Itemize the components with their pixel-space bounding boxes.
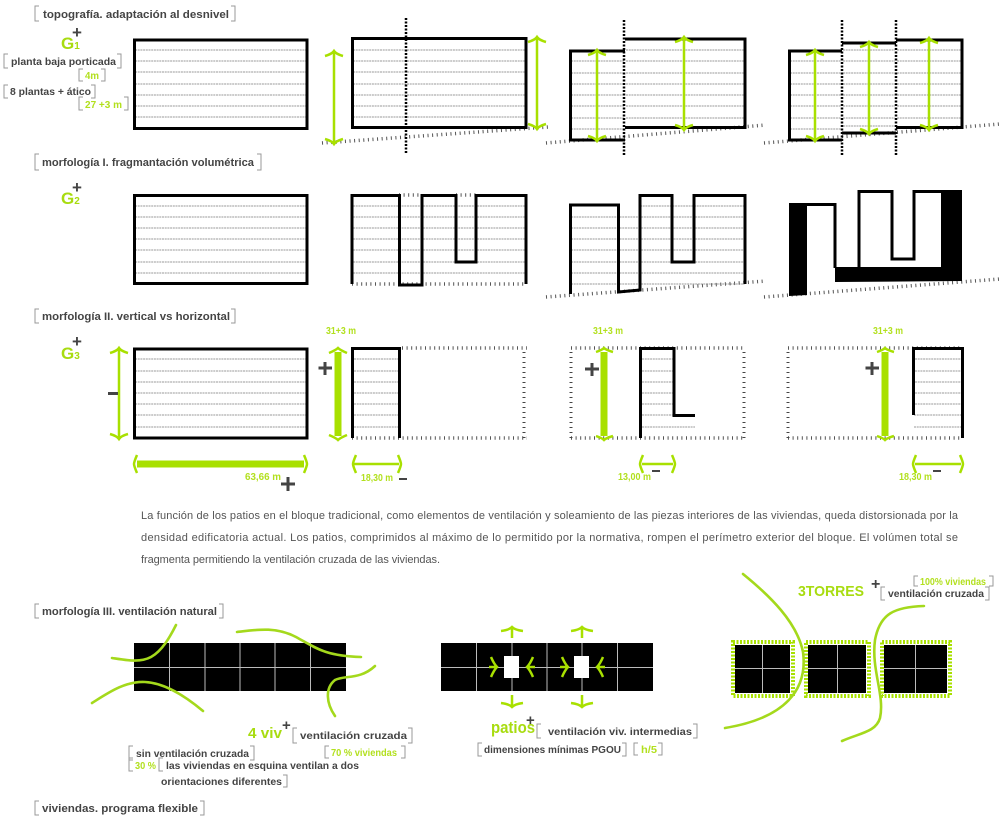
notes: 4 viv: ventilación cruzada — [300, 731, 407, 742]
heading: viviendas: viviendas. programa flexible — [42, 803, 198, 815]
diagram: G1 stepped block in two parts — [546, 20, 766, 155]
notes: 3 torres: 3TORRES — [798, 583, 864, 600]
notes: 4 viv — [129, 717, 412, 788]
diagram: G3 corner bar 18,30 m: 31+3 m — [873, 326, 903, 337]
label: G3: G3 — [61, 344, 80, 363]
notes: 4 viv: 30 % — [135, 761, 156, 772]
diagram: G3 base block with dimensions: 63,66 m — [245, 472, 281, 483]
notes: 4 viv: 4 viv — [248, 725, 283, 742]
notes: patios: patios — [491, 718, 535, 737]
label: G1 with notes: 8 plantas + ático — [10, 87, 91, 98]
notes: 4 viv: 70 % viviendas — [331, 748, 397, 759]
plan: 4 viv block with wind curves — [92, 625, 375, 716]
diagram: G3 base block with dimensions — [108, 348, 307, 491]
notes: patios — [478, 712, 697, 756]
notes: 3 torres: ventilación cruzada — [888, 589, 984, 600]
diagram: G2 fragmented block — [352, 195, 526, 285]
notes: patios: + — [526, 712, 535, 729]
label: G3 — [61, 332, 82, 363]
diagram: G2 base block — [134, 196, 307, 284]
label: G1 with notes: planta baja porticada — [11, 57, 116, 68]
diagram: G1 stepped block in three parts — [764, 20, 1000, 155]
diagram: G1 base block — [134, 40, 307, 128]
diagram: G3 corner bar 18,30 m — [788, 326, 963, 483]
label: G1 with notes: + — [72, 23, 82, 42]
label: G1 with notes — [4, 23, 128, 111]
diagram: G3 L-shaped bar 13,00 m: 13,00 m — [618, 472, 651, 483]
diagram: G3 L-shaped bar 13,00 m — [571, 326, 744, 483]
diagram: G2 fragmented block on slope — [546, 196, 766, 297]
notes: 4 viv: las viviendas en esquina ventilan a dos — [166, 761, 359, 772]
text block: description: fragmenta permitiendo la ventilación cruzada de las viviendas. — [141, 554, 440, 566]
notes: patios: dimensiones mínimas PGOU — [484, 745, 621, 756]
heading: morfología III: morfología III. ventilación natural — [42, 606, 217, 618]
heading: topografía: topografía. adaptación al desnivel — [43, 9, 229, 21]
heading: morfología II: morfología II. vertical vs horizontal — [42, 311, 230, 323]
diagram: G3 narrow bar 18,30 m: 18,30 m — [361, 473, 393, 484]
text block: description: densidad edificatoria actual. Los patios, comprimidos al máximo de lo permitido por la normativa, rompen el perímetro exterior del bloque. El volúmen total se — [141, 532, 958, 544]
notes: 4 viv: orientaciones diferentes — [161, 777, 282, 788]
diagram: G3 narrow bar 18,30 m — [318, 326, 527, 484]
label: G1 with notes: 27 +3 m — [85, 100, 122, 111]
text block: description: La función de los patios en el bloque tradicional, como elementos de ventilación y soleamiento de las piezas interiores de las viviendas, queda distorsionada por la — [141, 510, 959, 522]
label: G3: + — [72, 332, 82, 351]
notes: patios: ventilación viv. intermedias — [548, 727, 692, 738]
notes: 4 viv: + — [282, 717, 291, 734]
notes: 3 torres: + — [871, 576, 880, 593]
label: G2: G2 — [61, 189, 80, 208]
notes: 3 torres: 100% viviendas — [920, 577, 986, 588]
notes: 4 viv: sin ventilación cruzada — [136, 749, 249, 760]
diagram: G3 corner bar 18,30 m: 18,30 m — [899, 472, 932, 483]
diagram: G3 narrow bar 18,30 m: 31+3 m — [326, 326, 356, 337]
label: G1 with notes: 4m — [85, 71, 99, 82]
label: G2 — [61, 178, 82, 208]
notes: 3 torres — [798, 576, 993, 600]
notes: patios: h/5 — [641, 745, 657, 756]
diagram: G2 block with solid black mass — [764, 190, 1000, 297]
plan: three towers with wind curves — [725, 574, 950, 741]
plan: block with patios and arrows — [441, 627, 653, 707]
text block: description — [141, 510, 959, 566]
heading: morfología I — [35, 154, 261, 170]
diagram: G3 L-shaped bar 13,00 m: 31+3 m — [593, 326, 623, 337]
label: G1 with notes: G1 — [61, 34, 80, 53]
heading: morfología I: morfología I. fragmantación volumétrica — [42, 157, 255, 169]
diagram: G1 block with one cut on slope — [322, 18, 548, 154]
label: G2: + — [72, 178, 82, 197]
